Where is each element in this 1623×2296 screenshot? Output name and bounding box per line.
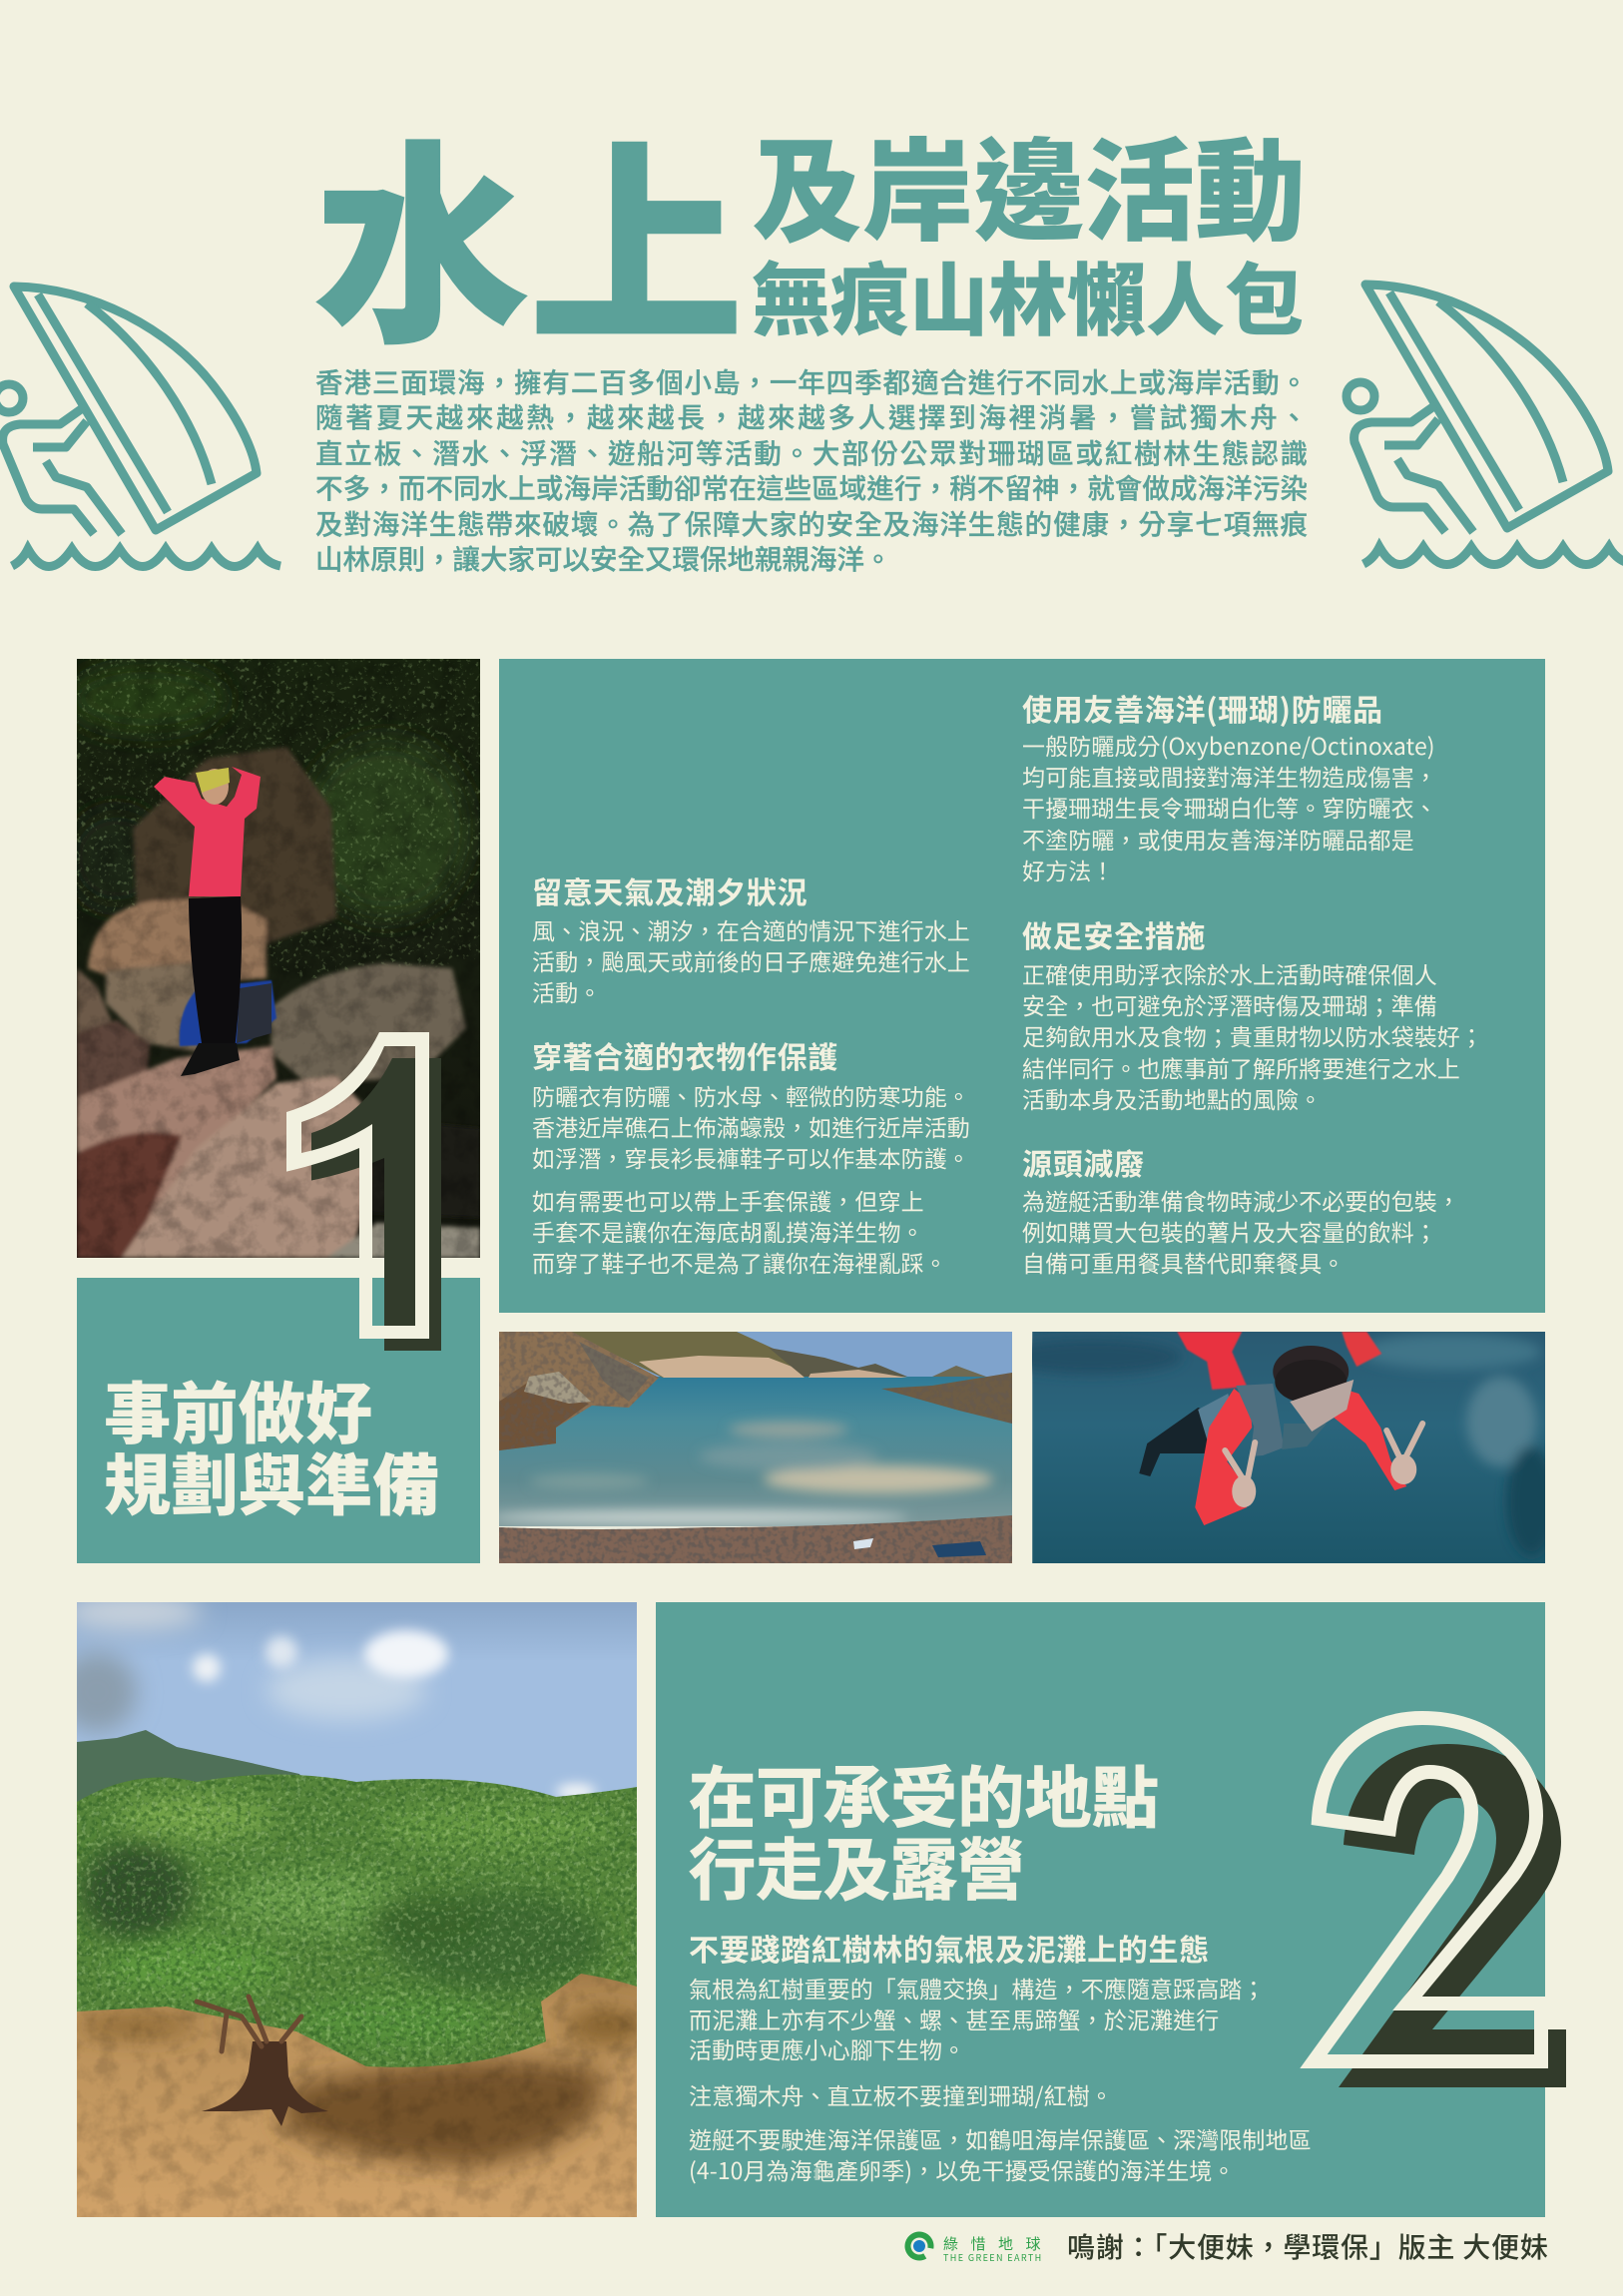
title	[314, 75, 1306, 385]
text: sunscreen: 均可能直接或間接對海洋生物造成傷害，	[1022, 759, 1437, 793]
text: clothing: 香港近岸礁石上佈滿蠔殼，如進行近岸活動	[532, 1109, 970, 1143]
intro text: 直立板、潛水、浮潛、遊船河等活動。大部份公眾對珊瑚區或紅樹林生態認識	[315, 431, 1308, 471]
logo: the green earth	[904, 2232, 1053, 2264]
icon: windsurfer left	[0, 282, 281, 571]
number 2	[1300, 1711, 1566, 2087]
heading: section 1: 事前做好	[104, 1361, 372, 1457]
text: clothing: 防曬衣有防曬、防水母、輕微的防寒功能。	[532, 1078, 970, 1112]
text: safety: 安全，也可避免於浮潛時傷及珊瑚；準備	[1022, 987, 1437, 1021]
intro text	[315, 360, 1308, 577]
text: safety: 活動本身及活動地點的風險。	[1022, 1081, 1322, 1115]
text: weather: 風、浪況、潮汐，在合適的情況下進行水上	[532, 912, 970, 946]
text: safety: 足夠飲用水及食物；貴重財物以防水袋裝好；	[1022, 1018, 1483, 1052]
heading: clothing: 穿著合適的衣物作保護	[532, 1033, 838, 1077]
title: second line: 無痕山林懶人包	[752, 237, 1304, 351]
text: gloves: 如有需要也可以帶上手套保護，但穿上	[532, 1183, 924, 1217]
text: sunscreen	[1022, 728, 1437, 886]
photo: snorkeler underwater	[1032, 1332, 1545, 1563]
title: large characters: 水上	[314, 75, 744, 385]
logo name: 綠惜地球	[943, 2233, 1053, 2254]
logo icon	[904, 2232, 934, 2260]
title: first line: 及岸邊活動	[752, 102, 1306, 263]
number 2 outline	[1314, 1718, 1541, 2061]
text: sunscreen: 好方法！	[1022, 853, 1114, 886]
tree trunk	[197, 1997, 328, 2126]
heading: sunscreen: 使用友善海洋(珊瑚)防曬品	[1022, 686, 1383, 730]
text: waste: 例如購買大包裝的薯片及大容量的飲料；	[1022, 1214, 1437, 1248]
heading: section 2: 行走及露營	[689, 1817, 1024, 1914]
logo english: THE GREEN EARTH	[943, 2251, 1043, 2264]
text: kayak: 注意獨木舟、直立板不要撞到珊瑚/紅樹。	[689, 2077, 1113, 2111]
panel: section 1 title	[77, 1278, 480, 1563]
heading: section 2	[689, 1745, 1159, 1914]
intro text: 隨著夏天越來越熱，越來越長，越來越多人選擇到海裡消暑，嘗試獨木舟、	[315, 395, 1308, 435]
text: gloves	[532, 1183, 947, 1279]
number 1 shadow	[311, 1058, 441, 1351]
text: gloves: 而穿了鞋子也不是為了讓你在海裡亂踩。	[532, 1245, 947, 1279]
intro text: 不多，而不同水上或海岸活動卻常在這些區域進行，稍不留神，就會做成海洋污染	[315, 466, 1308, 506]
text: yacht: (4-10月為海龜產卵季)，以免干擾受保護的海洋生境。	[689, 2152, 1236, 2186]
text: clothing	[532, 1078, 970, 1174]
text: waste: 自備可重用餐具替代即棄餐具。	[1022, 1245, 1345, 1279]
text: safety: 結伴同行。也應事前了解所將要進行之水上	[1022, 1050, 1460, 1084]
photo: woman in red rash guard on rocks	[77, 659, 480, 1258]
text: sunscreen: 不塗防曬，或使用友善海洋防曬品都是	[1022, 822, 1414, 856]
heading: weather: 留意天氣及潮夕狀況	[532, 868, 808, 912]
icon: windsurfer right	[1342, 280, 1623, 569]
snorkeler	[1139, 1346, 1422, 1525]
text: sunscreen: 干擾珊瑚生長令珊瑚白化等。穿防曬衣、	[1022, 790, 1437, 824]
credit: 鳴謝：「大便妹，學環保」版主 大便妹	[1067, 2226, 1549, 2266]
text: weather	[532, 912, 970, 1008]
text: clothing: 如浮潛，穿長衫長褲鞋子可以作基本防護。	[532, 1140, 970, 1174]
text: waste: 為遊艇活動準備食物時減少不必要的包裝，	[1022, 1183, 1460, 1217]
text: safety: 正確使用助浮衣除於水上活動時確保個人	[1022, 956, 1437, 990]
heading: section 1	[104, 1361, 439, 1529]
text: mangrove	[689, 1971, 1266, 2065]
panel: section 1 text	[499, 659, 1545, 1313]
text: mangrove: 活動時更應小心腳下生物。	[689, 2031, 965, 2065]
text: weather: 活動，颱風天或前後的日子應避免進行水上	[532, 943, 970, 977]
text: gloves: 手套不是讓你在海底胡亂摸海洋生物。	[532, 1214, 924, 1248]
heading: safety: 做足安全措施	[1022, 912, 1206, 956]
heading: mangrove: 不要踐踏紅樹林的氣根及泥灘上的生態	[689, 1926, 1210, 1970]
number 1	[286, 1032, 441, 1351]
photo: rocky bay	[499, 1332, 1012, 1563]
heading: section 1: 規劃與準備	[104, 1433, 439, 1529]
intro text: 香港三面環海，擁有二百多個小島，一年四季都適合進行不同水上或海岸活動。	[315, 360, 1308, 400]
photo: mangrove tree	[77, 1602, 637, 2217]
number 2 shadow	[1339, 1744, 1566, 2087]
text: yacht	[689, 2121, 1312, 2186]
text: weather: 活動。	[532, 974, 601, 1008]
text: sunscreen: 一般防曬成分(Oxybenzone/Octinoxate)	[1022, 728, 1435, 762]
panel: section 2	[656, 1602, 1545, 2217]
text: mangrove: 氣根為紅樹重要的「氣體交換」構造，不應隨意踩高踏；	[689, 1971, 1266, 2005]
intro text: 山林原則，讓大家可以安全又環保地親親海洋。	[315, 537, 892, 577]
number 1 outline	[286, 1032, 429, 1339]
text: waste	[1022, 1183, 1460, 1279]
text: yacht: 遊艇不要駛進海洋保護區，如鶴咀海岸保護區、深灣限制地區	[689, 2121, 1312, 2155]
heading: section 2: 在可承受的地點	[689, 1745, 1159, 1842]
person	[154, 767, 276, 1076]
intro text: 及對海洋生態帶來破壞。為了保障大家的安全及海洋生態的健康，分享七項無痕	[315, 502, 1308, 542]
text: mangrove: 而泥灘上亦有不少蟹、螺、甚至馬蹄蟹，於泥灘進行	[689, 2002, 1219, 2035]
heading: waste: 源頭減廢	[1022, 1140, 1145, 1184]
text: safety	[1022, 956, 1483, 1115]
